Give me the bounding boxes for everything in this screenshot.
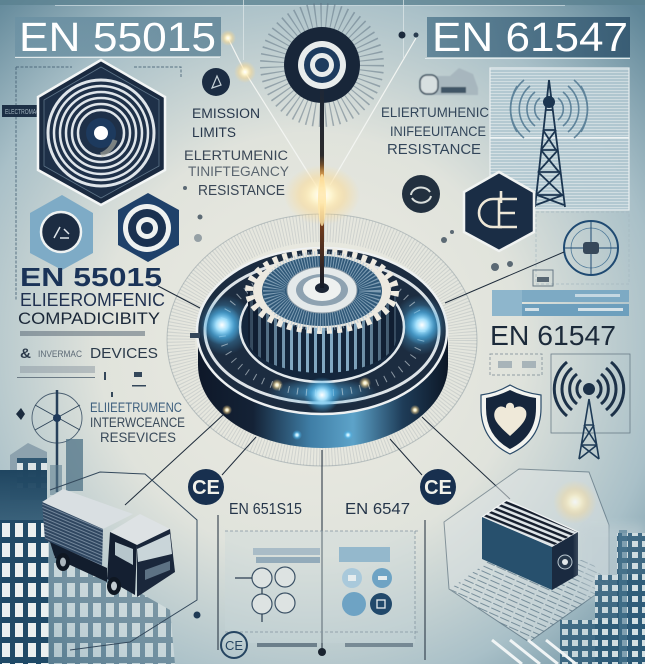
top circular emblem (272, 15, 372, 115)
heading: EN 55015 electromagnetic compatibility: ELIEEROMFENIC (20, 290, 165, 310)
panel: radio tower (490, 68, 629, 210)
heading: EN 61547: EN 61547 (490, 320, 616, 351)
text: devices line (17, 345, 158, 378)
text: right immunity block: ELIERTUMHENIC (381, 104, 489, 120)
outline around truck (50, 472, 197, 650)
icon: antenna dial (16, 390, 82, 492)
icon: shield (481, 385, 541, 454)
text: devices line: DEVICES (90, 345, 158, 362)
inner white ring (240, 272, 404, 382)
device glow points (202, 305, 442, 440)
text: right immunity block: RESISTANCE (387, 142, 481, 158)
panel: blue spec bars (492, 290, 629, 316)
text: right immunity block (381, 104, 489, 158)
skyline buildings (0, 439, 175, 664)
text: emission limits (192, 106, 260, 140)
icon: truck (42, 489, 175, 597)
badge: small outlined CE and caption: CE (225, 638, 243, 653)
heading: EN 55015 electromagnetic compatibility (18, 262, 165, 336)
title: EN 61547: EN 61547 (432, 14, 628, 60)
badge: CE left: CE (192, 477, 220, 499)
light flare near module (553, 480, 597, 524)
central device (197, 248, 448, 448)
text: left interference block: ELIIEETRUMENC (90, 400, 182, 415)
text: left interference block: RESEVICES (100, 429, 176, 445)
bracket lines and dark label (2, 67, 181, 300)
needle with light flare (284, 90, 360, 288)
device base (198, 332, 448, 448)
icon: dark blue target hexagon (118, 193, 179, 262)
device top ring (197, 248, 447, 414)
well ticks (222, 269, 422, 393)
text: devices line: & (20, 345, 31, 361)
text: emission limits: EMISSION (192, 106, 260, 121)
icon: light blue hexagon (30, 195, 93, 270)
text: right immunity block: INIFEEUITANCE (390, 123, 486, 139)
halftone arc around the device (167, 214, 477, 466)
icon: large hexagon with concentric rings (38, 60, 165, 205)
icon: small dark circle (202, 68, 230, 96)
icon: wifi antenna (551, 354, 630, 459)
small diagram above wifi (490, 354, 542, 375)
text: left immunity block: RESISTANCE (198, 183, 285, 199)
device gear top (249, 252, 395, 330)
panel: hexagon with power module (444, 469, 609, 642)
text: left immunity block: ELERTUMENIC (184, 148, 288, 163)
right bars (339, 547, 390, 562)
bottom right building (492, 525, 645, 664)
heading: EN 55015 electromagnetic compatibility: COMPADICIBITY (18, 309, 160, 328)
label: EN 6547: EN 6547 (345, 501, 410, 518)
icon: car-like sketch (420, 68, 478, 95)
text: left immunity block (184, 148, 290, 199)
bracket lines and dark label: ELECTROMAGNET (5, 109, 51, 116)
well glows (197, 295, 253, 355)
icon: CE hexagon (464, 172, 534, 251)
icon: dark cycle circle (402, 175, 440, 213)
title: EN 55015: EN 55015 (19, 14, 216, 60)
panel: standards flow diagram (225, 531, 420, 643)
text: devices line: INVERMAC (38, 349, 82, 359)
badge: CE left (188, 469, 224, 505)
connector lines from the emblem (228, 38, 416, 195)
text: left interference block (90, 400, 185, 445)
right nodes (342, 568, 362, 588)
connector dots and sparkles (220, 30, 418, 83)
text: left interference block: INTERWCEANCE (90, 414, 185, 430)
text: emission limits: LIMITS (192, 125, 236, 140)
left nodes (252, 567, 295, 614)
badge: CE right (420, 469, 456, 505)
connector lines to the device (125, 252, 564, 660)
small sensor marks (183, 186, 553, 286)
badge: CE right: CE (424, 477, 452, 499)
badge: small outlined CE and caption (194, 612, 413, 658)
left bars (253, 548, 320, 555)
heading: EN 55015 electromagnetic compatibility: EN 55015 (20, 262, 162, 292)
floor lines (450, 560, 609, 642)
scattered tick marks (104, 333, 200, 397)
label: EN 651S15: EN 651S15 (229, 501, 302, 518)
icon: target scope (536, 212, 629, 284)
text: left immunity block: TINIFTEGANCY (188, 163, 290, 179)
device cooling fins (248, 292, 396, 373)
module (482, 500, 578, 547)
